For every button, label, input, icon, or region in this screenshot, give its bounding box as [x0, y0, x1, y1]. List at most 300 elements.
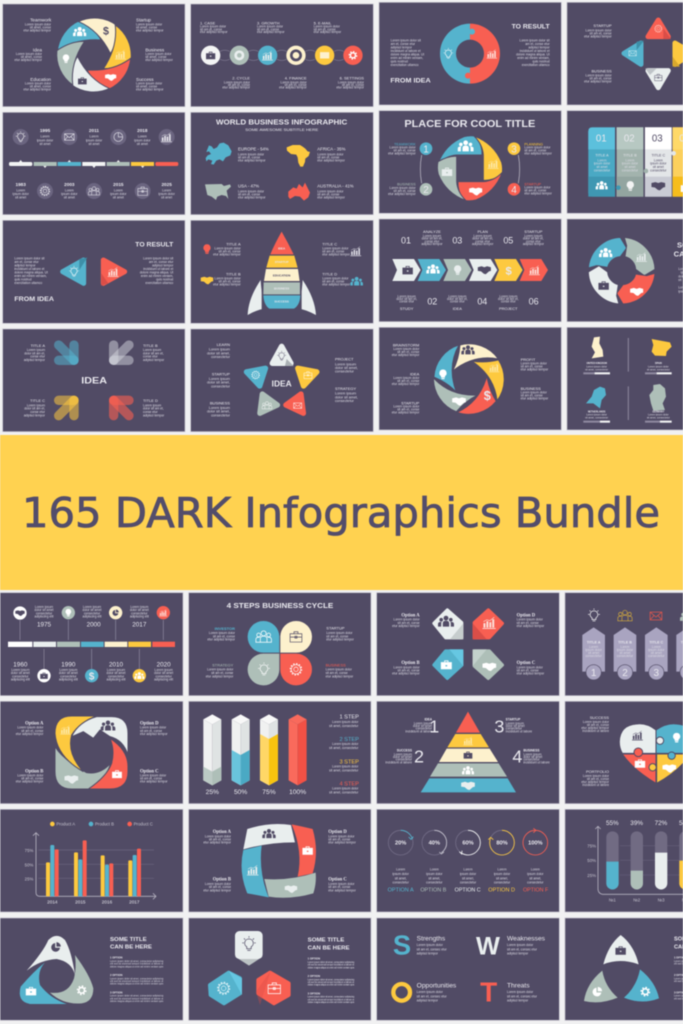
years and text: dolor sit amet — [11, 671, 30, 675]
labels: am et, conse etur — [14, 260, 39, 264]
column 02: consectetur — [622, 168, 638, 172]
chart: rocket layers: EDUCATION — [273, 273, 290, 277]
labels: etur adipisci tempor — [317, 158, 345, 162]
ring: 20% — [388, 830, 413, 855]
labels: Option B — [401, 661, 420, 666]
option text: sit amet, — [428, 876, 440, 880]
labels — [417, 936, 546, 1003]
labels: etur adipisci tempor — [584, 80, 612, 84]
labels — [24, 343, 164, 417]
labels: sit am et, conse — [590, 31, 612, 35]
labels: dolor sit amet — [413, 724, 432, 728]
heading: CAN BE HERE — [110, 944, 152, 950]
number badges: 4 — [511, 185, 517, 196]
option list: elit sed do eiusmod tempor incididunt ut labore et — [308, 998, 355, 1001]
years — [13, 128, 175, 200]
labels: Lorem ipsum dolor — [326, 631, 352, 635]
labels: etur adipisci tempor — [16, 780, 43, 784]
labels: conse etur — [501, 300, 516, 304]
values: №3 — [657, 898, 665, 903]
labels: adipisci tempor — [421, 242, 443, 246]
labels: sit am et, conse — [21, 729, 44, 733]
labels: Lorem ipsum — [414, 721, 432, 725]
group: bottom right slides — [377, 809, 683, 1020]
labels: incididunt ut labore — [385, 760, 412, 764]
bar: 50% — [232, 714, 250, 785]
labels: sit am et, consec etur — [417, 994, 447, 998]
ring: 100%: 100% — [528, 841, 543, 847]
labels and progress bars: Lorem ipsum dolor — [648, 366, 669, 369]
step labels: sit amet, consectetur — [329, 768, 358, 772]
labels: Lorem ipsum dolor — [16, 52, 42, 56]
labels: Opportunities — [417, 983, 457, 990]
labels: Lorem ipsum dolor — [521, 361, 547, 365]
labels: Teamwork — [30, 18, 52, 23]
labels: Lorem ipsum dolor — [521, 390, 547, 394]
labels: sit am et, conse — [342, 83, 364, 87]
years: sit amet — [113, 196, 124, 200]
labels: Lorem ipsum dolor — [317, 152, 343, 156]
step circles — [201, 46, 363, 65]
labels: etur adipisci tempor — [392, 624, 420, 628]
labels: TO RESULT — [135, 241, 173, 248]
labels: sit am et, conse — [587, 723, 609, 727]
chart: puzzle ring — [440, 24, 500, 84]
labels: Lorem ipsum dolor — [140, 726, 166, 730]
axis labels: 2016 — [102, 900, 113, 905]
labels: sit am et, conse — [257, 27, 279, 31]
years: sit amet — [15, 196, 26, 200]
labels: dolor sit am et, — [422, 237, 442, 241]
years and text: consectetur — [84, 611, 100, 615]
axis labels: 2015 — [75, 900, 86, 905]
legend: Product C — [134, 822, 153, 827]
labels: Option A — [25, 722, 44, 727]
labels: Lorem ipsum — [474, 234, 492, 238]
map: europe — [206, 143, 232, 165]
column 02: TITLE B — [623, 154, 637, 158]
letter W: W — [476, 932, 500, 960]
years and text: adipiscing elit — [59, 677, 78, 681]
years and text: dolor sit amet — [107, 671, 126, 675]
column 02 — [616, 127, 643, 197]
tag 2: sit amet — [619, 651, 631, 655]
labels: BUSINESS — [210, 400, 230, 405]
labels: am et, conse etur — [525, 42, 550, 46]
labels — [200, 20, 364, 90]
labels: Lorem ipsum — [27, 348, 45, 352]
labels: etur adipisci tempor — [203, 841, 231, 845]
labels: consectetur — [523, 758, 540, 762]
labels: TITLE A — [226, 242, 241, 247]
labels: conse etur — [526, 239, 541, 243]
labels: Lorem ipsum — [209, 377, 230, 381]
labels: Lorem ipsum dolor — [517, 618, 543, 622]
years: sit amet — [161, 196, 172, 200]
labels: ANALYZE — [423, 229, 441, 234]
chart: ring arrows — [588, 237, 655, 304]
group: upper right slides — [379, 2, 683, 213]
numbers: 1 — [429, 716, 439, 736]
option text: OPTION B — [420, 888, 447, 894]
option text: consectetur — [527, 881, 543, 885]
labels: etur adipisci tempor — [257, 30, 285, 34]
labels: conse etur — [143, 355, 158, 359]
panel: arrow ring — [567, 219, 683, 322]
icons — [201, 244, 363, 286]
axis labels: 75% — [25, 848, 33, 853]
chart: pinwheel — [46, 6, 142, 104]
labels — [396, 229, 544, 311]
panel: swot — [377, 918, 559, 1020]
labels: dolor sit amet — [393, 755, 412, 759]
labels: Lorem ipsum dolor — [238, 152, 264, 156]
column 01 — [588, 127, 615, 197]
labels: etur adipisci tempor — [517, 672, 544, 676]
chart: five triangles — [244, 346, 320, 419]
labels: IDEA — [453, 306, 462, 311]
labels: incididunt ut labore — [405, 729, 432, 733]
percent labels: 100% — [289, 789, 306, 796]
labels: Lorem ipsum — [335, 362, 356, 366]
column 03: consectetur — [650, 168, 666, 172]
labels: adipisci tempor — [24, 413, 45, 417]
tag 2: 2 — [622, 668, 628, 679]
labels: Option D — [517, 613, 536, 618]
labels: Lorem ipsum dolor — [25, 22, 51, 26]
labels: sit am et, conse — [397, 350, 420, 354]
chart: shapes — [210, 931, 289, 1005]
ring: 20%: 20% — [395, 841, 406, 847]
legend: Product A — [56, 822, 75, 827]
labels: sit am et, conse — [238, 155, 260, 159]
panel: bar chart products — [0, 809, 183, 912]
labels: incididunt ut labore — [523, 760, 550, 764]
column 02: ipsum dolor — [622, 162, 638, 166]
labels: incididunt ut labore et — [391, 49, 421, 53]
panel: world business maps — [191, 112, 373, 215]
labels: Lorem ipsum dolor — [322, 246, 348, 250]
labels: etur adipisci tempor — [23, 28, 51, 32]
labels: sit am et, conse — [398, 621, 420, 625]
labels: etur adipisci tempor — [392, 353, 419, 357]
values: 25% — [587, 873, 596, 878]
labels: Lorem ipsum dolor — [394, 665, 420, 669]
tag 3: 3 — [654, 668, 660, 679]
years and text: Lorem ipsum — [107, 668, 125, 672]
option list: 2 OPTION — [110, 973, 122, 977]
title: 165 DARK Infographics Bundle — [22, 489, 660, 537]
years: 2003 — [64, 182, 75, 187]
labels: Lorem ipsum dolor — [215, 246, 241, 250]
column 01: Lorem — [598, 158, 607, 162]
labels: BUSINESS — [591, 68, 612, 73]
map: australia — [288, 183, 310, 201]
labels: Lorem ipsum dolor — [322, 276, 348, 280]
labels and progress bars: sit amet, consectetur — [647, 416, 670, 419]
labels — [238, 147, 354, 199]
panel: pinwheel six segments: $ — [103, 26, 109, 38]
tag 2: consectetur — [617, 654, 633, 658]
labels: STARTUP — [326, 625, 345, 630]
panel: five blade pinwheel: $ — [484, 389, 491, 403]
labels: sit am et, consec etur — [507, 947, 537, 951]
panel: five blade pinwheel — [379, 327, 561, 430]
axis labels: 25% — [25, 876, 33, 881]
tag 2: ipsum dolor — [617, 648, 633, 652]
labels: Weaknesses — [507, 936, 546, 943]
labels: dolor sit am et, — [447, 297, 468, 301]
labels: dolor sit amet, — [335, 366, 358, 370]
option list: dolore magna aliqua ut enim ad minim veniam quis — [308, 966, 355, 969]
option list — [110, 956, 164, 1003]
labels: PROFIT — [521, 357, 536, 362]
labels: etur adipisci tempor — [207, 638, 235, 642]
labels: Lorem ipsum dolor — [25, 82, 51, 86]
tag 1 — [582, 627, 605, 680]
labels: etur adipisci tempor — [328, 841, 356, 845]
labels — [14, 241, 174, 303]
labels: etur adipisci tempor — [521, 396, 548, 400]
labels: etur adipisci tempor — [392, 672, 420, 676]
map: africa — [287, 145, 310, 167]
labels: STARTUP — [524, 229, 543, 234]
labels: etur adipisci tempor — [392, 411, 419, 415]
labels: SUCCESS — [590, 715, 609, 720]
labels: sit amet, conse — [136, 25, 157, 29]
labels: TITLE A — [31, 343, 45, 348]
labels: Option A — [401, 613, 420, 618]
years: 2018 — [137, 128, 148, 133]
labels: conse etur — [450, 300, 465, 304]
years: ipsum dolor — [37, 138, 53, 142]
legend — [50, 822, 153, 827]
labels: quis nostrud — [156, 278, 174, 282]
labels: Lorem ipsum — [143, 403, 162, 407]
chart: grouped bars — [33, 833, 156, 899]
labels — [392, 343, 548, 415]
chart: pyramid layers — [421, 712, 516, 792]
column 01: ipsum dolor — [594, 162, 610, 166]
labels: PROJECT — [499, 306, 518, 311]
labels: etur adipisci tempor — [279, 86, 307, 90]
heading: WORLD BUSINESS INFOGRAPHIC — [216, 120, 347, 127]
panel: three rounded blades — [565, 918, 683, 1020]
years and text: dolor sit amet — [154, 671, 173, 675]
labels: STARTUP — [506, 718, 520, 722]
labels: etur adipisci tempor — [14, 58, 42, 62]
labels: sit am et, conse — [209, 885, 231, 889]
option text: ipsum dolor — [392, 872, 409, 876]
years and text: 2010 — [109, 661, 124, 668]
option text: consectetur — [460, 881, 476, 885]
labels: Option C — [328, 878, 347, 883]
labels: sit am et, conse — [521, 393, 543, 397]
option list: elit sed do eiusmod tempor incididunt ut labore et — [308, 964, 355, 967]
chart: chevrons — [392, 259, 548, 281]
labels: Lorem ipsum — [209, 348, 230, 352]
tag 3: sit amet — [651, 651, 662, 655]
group: lower left slides — [0, 593, 371, 804]
option list: dolore magna aliqua ut enim ad minim veniam quis — [110, 983, 164, 986]
labels: Option B — [25, 769, 43, 774]
labels: dolor sit amet, — [207, 351, 230, 355]
column 01: TITLE A — [595, 154, 609, 158]
labels: Lorem ipsum — [506, 721, 524, 725]
panel: triangle swirl — [0, 918, 183, 1020]
labels: etur adipisci tempor — [581, 780, 609, 784]
option text: OPTION D — [488, 888, 515, 894]
column 03: 03 — [652, 133, 663, 144]
option text: consectetur — [392, 881, 409, 885]
labels: STUDY — [400, 306, 414, 311]
option text: sit amet, — [529, 876, 541, 880]
labels: INVESTOR — [215, 626, 235, 631]
labels: etur adipisci tempor — [326, 638, 354, 642]
values: №2 — [633, 898, 641, 903]
labels — [392, 613, 544, 676]
labels: sit am et, conse — [326, 671, 348, 675]
option text: Lorem — [498, 868, 507, 872]
labels — [584, 23, 612, 84]
step labels: Lorem ipsum dolor — [332, 787, 358, 791]
labels: etur adipisci tempor — [136, 28, 164, 32]
chart: rocket layers: BUSINESS — [274, 286, 289, 290]
labels: dolor sit amet, — [207, 381, 230, 385]
years and text: dolor sit amet — [59, 671, 78, 675]
labels: Lorem ipsum dolor — [238, 189, 264, 193]
step labels: sit amet, consectetur — [329, 724, 358, 728]
labels: PROJECT — [335, 357, 354, 362]
pins: $ — [89, 671, 95, 682]
labels: Lorem ipsum dolor — [317, 189, 343, 193]
labels — [385, 718, 550, 764]
labels: sit am et, conse — [140, 776, 162, 780]
labels: dolor sit amet, — [335, 395, 358, 399]
labels: BRAINSTORM — [393, 343, 419, 348]
axis labels: 50% — [25, 862, 33, 867]
map: united kingdom — [592, 337, 603, 358]
heading: CAN BE HERE — [308, 945, 350, 951]
ring: 80% — [488, 830, 514, 855]
heading: SOME TITLE — [110, 937, 147, 943]
labels: EUROPE - 54% — [238, 147, 269, 152]
labels: LEARN — [217, 342, 230, 347]
labels: Threats — [507, 983, 530, 990]
years and text: Lorem ipsum — [35, 605, 53, 609]
labels: 1. CASE — [200, 20, 216, 25]
heading — [110, 937, 152, 950]
labels — [581, 715, 609, 787]
years: Lorem — [65, 188, 74, 192]
labels: TITLE D — [322, 272, 337, 277]
option text: ipsum dolor — [527, 872, 543, 876]
years and text: dolor sit amet — [83, 608, 102, 612]
labels: sit am et, conse — [209, 837, 231, 841]
labels: adipisci tempor — [523, 242, 544, 246]
labels: sit am et, conse — [317, 155, 340, 159]
values: 55% — [606, 820, 619, 827]
labels: Lorem ipsum dolor — [145, 52, 171, 56]
labels: sit am et, conse — [211, 671, 234, 675]
labels: Lorem ipsum — [523, 752, 542, 756]
labels: etur adipisci tempor — [145, 58, 173, 62]
panel: numbered tags — [565, 593, 683, 696]
labels: Lorem ipsum dolor — [507, 943, 533, 947]
labels: BUSINESS — [397, 183, 416, 187]
labels: incididunt ut labore et — [143, 267, 173, 271]
option text: ipsum dolor — [426, 872, 442, 876]
subheading: SOME AWESOME SUBTITLE HERE — [245, 127, 319, 132]
labels: consectetur — [335, 399, 355, 403]
labels: SUCCESS — [397, 749, 412, 753]
tag 3: ipsum dolor — [648, 648, 664, 652]
labels: conse etur — [143, 410, 158, 414]
labels: Lorem ipsum dolor — [507, 990, 533, 994]
labels: adipisci tempor — [24, 358, 45, 362]
labels and progress bars: sit amet, consectetur — [585, 416, 608, 419]
option text: ipsum dolor — [460, 872, 476, 876]
number badges: 3 — [511, 144, 517, 155]
bar: 100% — [289, 714, 307, 785]
heading — [674, 240, 683, 258]
labels: Lorem ipsum dolor — [583, 720, 609, 724]
step numbers: 06 — [529, 296, 539, 306]
labels: sit am et, conse — [524, 149, 547, 153]
labels: etur adipisci tempor — [203, 888, 231, 892]
labels: dolor sit am et, — [396, 297, 417, 301]
numbers: 3 — [494, 716, 504, 736]
column 02: 02 — [624, 133, 635, 144]
labels: etur adipisci tempor — [238, 195, 266, 199]
panel: place for cool title — [379, 111, 561, 213]
labels: sit am et, conse — [140, 729, 162, 733]
years and text: adipiscing elit — [83, 614, 102, 618]
labels: Education — [30, 77, 51, 82]
labels: adipisci tempor — [143, 358, 164, 362]
years: ipsum dolor — [158, 192, 175, 196]
panel: heart swirl — [0, 701, 183, 804]
labels: consectetur — [211, 413, 231, 417]
years: sit amet — [88, 142, 100, 146]
labels: enim ad minim veniam, — [517, 56, 550, 60]
heading: 4 STEPS BUSINESS CYCLE — [227, 601, 333, 610]
option text: consectetur — [494, 881, 510, 885]
group: lower right slides — [377, 593, 683, 804]
timeline icons — [13, 129, 175, 199]
labels: USA - 47% — [238, 184, 259, 189]
step numbers: 01 — [401, 235, 411, 245]
labels: IDEA — [424, 718, 433, 722]
labels: sit am et, conse — [200, 27, 222, 31]
labels: sit amet, conse — [136, 85, 157, 89]
panel: country maps — [567, 327, 683, 430]
labels: sit amet, conse — [30, 25, 51, 29]
tag 3: consectetur — [648, 654, 664, 658]
column 02: sit amet — [624, 165, 636, 169]
labels: STARTUP — [401, 400, 420, 405]
years and text: consectetur — [36, 611, 52, 615]
years and text: consectetur — [12, 674, 28, 678]
years and text: 2017 — [132, 622, 147, 629]
labels: adipisci tempor — [417, 999, 438, 1003]
labels: Option C — [517, 661, 536, 666]
labels: Option C — [140, 769, 159, 774]
chart: rocket layers: IDEA — [278, 247, 286, 251]
years: Lorem — [90, 135, 99, 139]
labels: Lorem ipsum dolor — [140, 773, 166, 777]
labels: consectetur — [396, 758, 412, 762]
